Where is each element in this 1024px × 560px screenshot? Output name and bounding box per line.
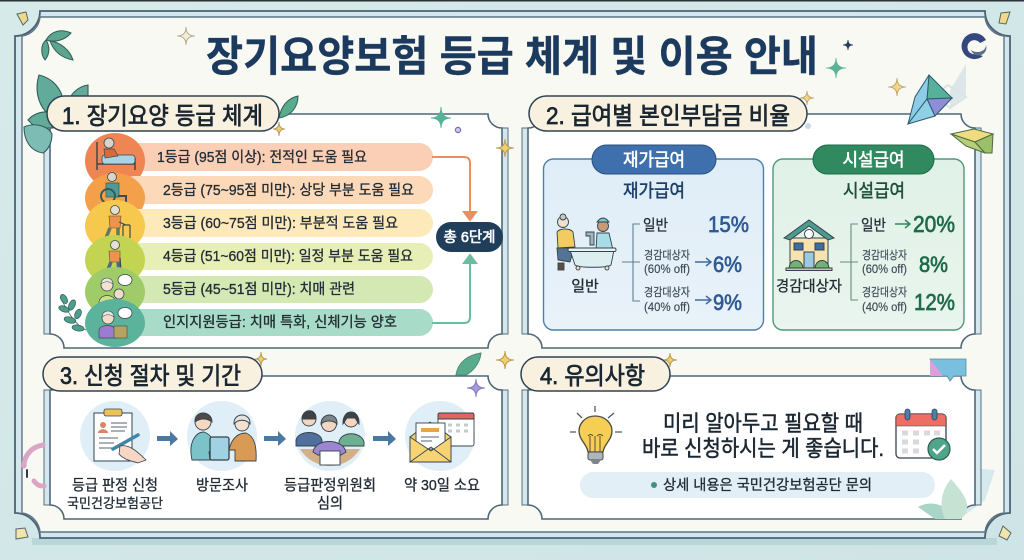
- callout text: 바로 신청하시는 게 좋습니다.: [642, 436, 884, 461]
- callout text: [642, 411, 884, 461]
- decoration: panel sparkles and dots: [255, 107, 811, 397]
- facility care subtitle: 시설급여: [843, 181, 905, 201]
- row: reduced 9 percent: 경감대상자: [644, 285, 690, 299]
- decoration: left big leaves: [24, 75, 88, 153]
- arrow: from cognitive grade to total: [432, 255, 476, 323]
- decoration: top left leaves: [42, 31, 73, 60]
- row: reduced 9 percent: 9%: [713, 290, 742, 315]
- grade 3 row: 3등급 (60~75점 미만): 부분적 도움 필요: [163, 215, 398, 232]
- step 4: about 30 days: [404, 401, 480, 494]
- row: general 20 percent: 일반: [861, 217, 886, 234]
- icon: clipboard and pen: [80, 401, 150, 471]
- grade list: [85, 133, 433, 347]
- icon: light bulb: [570, 406, 622, 464]
- facility care tag: 시설급여: [842, 150, 904, 170]
- row: reduced 12 percent: [862, 285, 955, 315]
- heading: section 2: 2. 급여별 본인부담금 비율: [546, 103, 790, 130]
- decoration: government emblem: [962, 33, 986, 59]
- label: review: 심의: [317, 495, 343, 512]
- label: home visit: 방문조사: [196, 477, 248, 494]
- row: reduced 8 percent: 경감대상자: [862, 248, 907, 262]
- panel: home care: [544, 145, 764, 330]
- icon: visitor and elder: [187, 401, 257, 471]
- panel: section 1 frame: [44, 114, 508, 348]
- decoration: pink arcs: [24, 445, 44, 486]
- label: general: 일반: [571, 278, 599, 295]
- panel: facility care: [773, 145, 964, 330]
- row: reduced 6 percent: [644, 248, 742, 277]
- arrow: step 3 to 4: [373, 431, 396, 446]
- grade 2 row: 2등급 (75~95점 미만): 상당 부분 도움 필요: [163, 182, 414, 199]
- row: reduced 8 percent: 8%: [919, 252, 948, 277]
- decoration: folded paper: [930, 359, 966, 381]
- row: reduced 9 percent: (40% off): [644, 302, 690, 314]
- decoration: olive crystal: [951, 129, 993, 153]
- bracket: [840, 224, 858, 300]
- label: reduced target: 경감대상자: [776, 278, 842, 295]
- badge: total 6 levels: [436, 222, 503, 252]
- heading: section 1: 1. 장기요양 등급 체계: [62, 103, 263, 130]
- row: reduced 6 percent: 6%: [713, 252, 742, 277]
- decoration: sparkles: [177, 27, 906, 105]
- row: reduced 12 percent: (40% off): [862, 302, 907, 314]
- row: general 15 percent: 일반: [643, 217, 668, 234]
- label: NHIS: 국민건강보험공단: [67, 496, 163, 511]
- title: 장기요양보험 등급 체계 및 이용 안내: [206, 33, 818, 80]
- panel: section 4 frame: [522, 376, 995, 519]
- grade 5 row: [85, 267, 433, 317]
- row: reduced 8 percent: [862, 248, 948, 277]
- row: general 15 percent: 15%: [708, 212, 749, 237]
- icon: envelope and calendar: [405, 401, 475, 471]
- row: reduced 12 percent: 12%: [914, 289, 955, 315]
- facility care tag: [813, 145, 934, 174]
- cognitive support row: 인지지원등급: 치매 특화, 신체기능 양호: [163, 314, 397, 331]
- grade 3 row: [85, 200, 433, 252]
- step 2: home visit: [187, 401, 257, 494]
- label: about 30 days: 약 30일 소요: [404, 477, 480, 494]
- heading: section 4: [521, 357, 670, 391]
- arrow: step 2 to 3: [264, 431, 286, 446]
- arrow: from grade 1 to total: [432, 157, 476, 220]
- note pill: [580, 472, 935, 498]
- decoration: sprig at left of grade list: [58, 293, 86, 332]
- grade 4 row: 4등급 (51~60점 미만): 일정 부분 도움 필요: [163, 248, 413, 265]
- row: general 20 percent: 20%: [913, 211, 955, 237]
- row: reduced 9 percent: [644, 285, 742, 315]
- grade 4 row: [85, 235, 433, 285]
- label: grade application: 등급 판정 신청: [72, 477, 158, 494]
- row: reduced 6 percent: 경감대상자: [644, 248, 690, 262]
- heading: section 4: 4. 유의사항: [540, 363, 645, 390]
- grade 1 row: [85, 133, 433, 189]
- grade 2 row: [85, 172, 433, 223]
- panel: section 3 frame: [44, 376, 508, 519]
- home care tag: 재가급여: [623, 150, 685, 170]
- decoration: leaf beside heading 1: [279, 96, 298, 118]
- grade 1 row: 1등급 (95점 이상): 전적인 도움 필요: [157, 149, 367, 166]
- row: reduced 8 percent: (60% off): [862, 264, 907, 276]
- step 3: committee: [284, 401, 376, 512]
- icon: committee members: [295, 401, 365, 471]
- icon: bath care: [557, 214, 616, 270]
- decoration: crystal gem: [908, 64, 966, 124]
- row: general 15 percent: [643, 212, 749, 237]
- arrow: step 1 to 2: [157, 431, 178, 446]
- panel: section 2 frame: [522, 114, 981, 348]
- bracket: [622, 224, 640, 301]
- heading: section 3: 3. 신청 절차 및 기간: [60, 363, 241, 390]
- row: reduced 12 percent: 경감대상자: [862, 285, 907, 299]
- home care subtitle: 재가급여: [623, 181, 685, 201]
- row: reduced 6 percent: (60% off): [644, 264, 690, 276]
- icon: care facility house: [784, 220, 834, 270]
- badge: total 6 levels: 총 6단계: [444, 229, 496, 246]
- home care tag: [592, 145, 716, 174]
- row: general 20 percent: [861, 211, 955, 237]
- callout text: 미리 알아두고 필요할 때: [663, 411, 863, 436]
- grade 5 row: 5등급 (45~51점 미만): 치매 관련: [163, 281, 355, 298]
- step 1: application: [67, 401, 163, 511]
- icon: calendar check: [896, 409, 950, 460]
- note pill: 상세 내용은 국민건강보험공단 문의: [663, 477, 872, 494]
- cognitive support row: [85, 299, 433, 347]
- label: committee: 등급판정위원회: [284, 477, 376, 494]
